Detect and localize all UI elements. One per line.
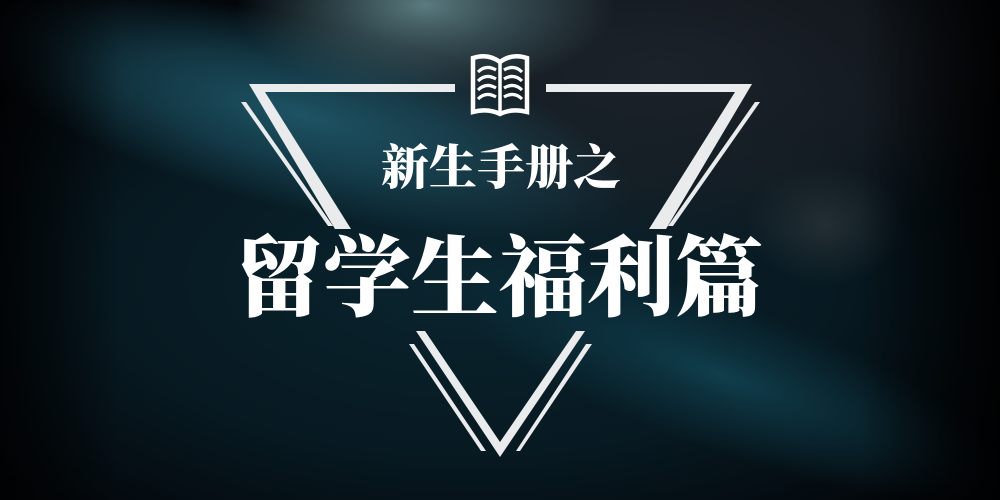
left thin strip	[241, 102, 333, 226]
bottom left thin strip	[409, 344, 486, 451]
bottom right thin strip	[516, 344, 592, 451]
right thin strip	[668, 102, 760, 226]
top left bar and left thick strip	[249, 84, 455, 229]
main title: 留学生福利篇	[235, 232, 763, 329]
bottom thick V	[416, 331, 585, 457]
subtitle: 新生手册之	[381, 142, 621, 195]
top right bar and right thick strip	[546, 84, 752, 229]
